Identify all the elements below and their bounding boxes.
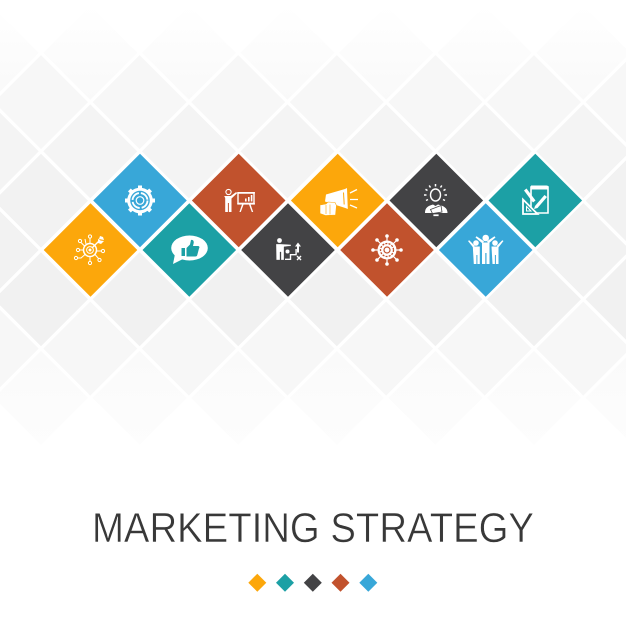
icon: gear xyxy=(125,186,155,216)
panel: ship wheel tile xyxy=(340,203,434,297)
icon: notepad, set square and pencil xyxy=(523,186,548,214)
panel: target tile xyxy=(44,203,137,297)
icon: person and stairs xyxy=(276,238,302,260)
icon: target with arrow xyxy=(74,235,105,265)
icon: head with light rays and megaphone xyxy=(424,184,448,216)
panel: design tools tile xyxy=(488,154,582,247)
icon: group of three people xyxy=(468,235,504,264)
panel: presentation tile xyxy=(192,154,286,247)
icon: presenter at board xyxy=(224,189,255,212)
panel: team tile xyxy=(439,203,532,297)
panel: idea person tile xyxy=(390,154,483,247)
icon: speech bubble with thumb xyxy=(171,236,208,264)
panel: thumbs up tile xyxy=(142,203,236,297)
background diamond grid xyxy=(0,6,626,445)
panel: megaphone tile xyxy=(291,154,385,247)
icon: hand holding megaphone xyxy=(320,188,358,216)
panel: strategy steps tile xyxy=(241,203,335,297)
panel: gear tile xyxy=(93,154,187,247)
legend diamonds xyxy=(248,574,377,592)
icon: ship wheel xyxy=(371,234,403,266)
title: MARKETING STRATEGY xyxy=(92,504,534,551)
